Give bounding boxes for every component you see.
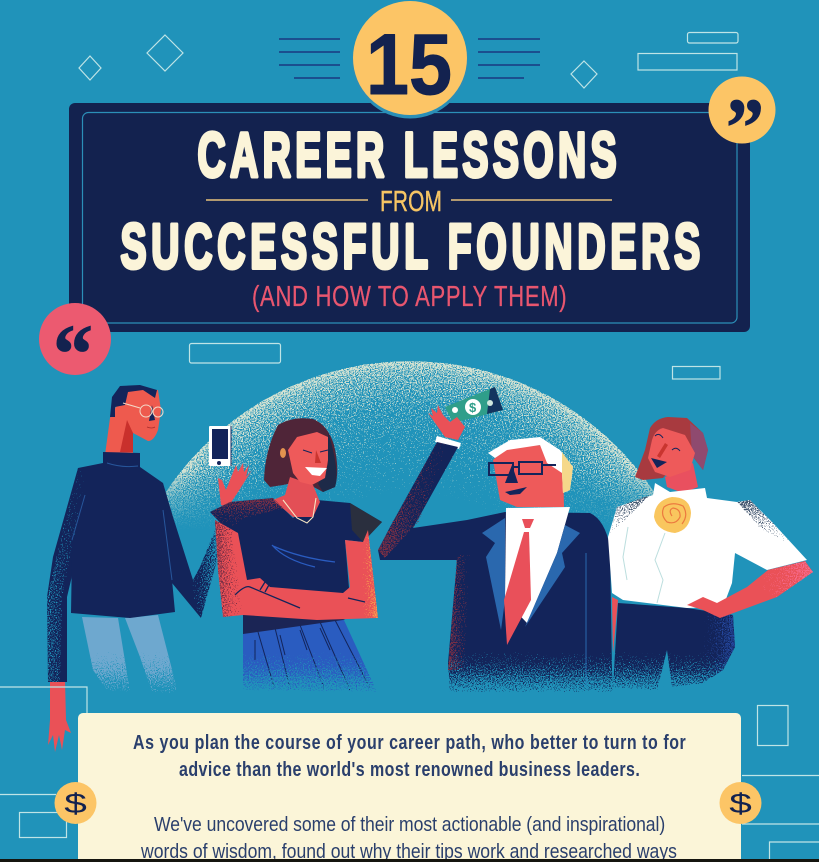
- subtitle: (AND HOW TO APPLY THEM): [252, 281, 567, 313]
- man shirt: [505, 507, 570, 623]
- man face: [493, 445, 564, 507]
- man shirt cuff: [435, 436, 461, 449]
- man tie: [522, 519, 534, 528]
- man right sleeve: [155, 483, 217, 618]
- intro heading text: advice than the world's most renowned business leaders.: [179, 758, 640, 780]
- man mouth: [505, 487, 527, 495]
- woman top: [210, 498, 382, 600]
- intro body text: We've uncovered some of their most actionable (and inspirational): [154, 813, 665, 835]
- number badge 15: 15: [366, 17, 452, 113]
- title: successful founders: SUCCESSFUL FOUNDERS: [120, 213, 700, 282]
- man hair: [110, 385, 157, 417]
- stippled dome behind figures: [166, 361, 654, 527]
- man white hair: [488, 437, 573, 493]
- icon: right dollar badge: [720, 782, 762, 824]
- icon: left dollar badge: $: [64, 788, 87, 819]
- cash bill: $: [469, 400, 477, 415]
- woman hair: [264, 418, 337, 492]
- woman pants: [613, 603, 735, 690]
- figure: man with turtleneck and phone: [47, 385, 217, 752]
- woman arm on hip: [687, 561, 813, 618]
- man left sleeve: [47, 468, 90, 682]
- man jeans: [82, 615, 178, 693]
- stippled fade at the feet of figures: [76, 652, 756, 696]
- intro body text: [140, 813, 677, 862]
- woman necklace: [283, 498, 316, 523]
- cash bill: [445, 387, 503, 423]
- woman blouse: [608, 483, 807, 608]
- woman hair: [635, 417, 708, 480]
- woman shoulder shading: [210, 498, 284, 530]
- title: from: FROM: [380, 186, 442, 218]
- corner outline near the card: [0, 687, 87, 716]
- title: career lessons: CAREER LESSONS: [198, 121, 617, 191]
- woman arms: [215, 520, 378, 620]
- intro card: [78, 713, 741, 862]
- icon: right dollar badge: $: [729, 788, 752, 819]
- figure: smiling woman with crossed arms: [210, 418, 382, 692]
- divider lines around from: [206, 199, 612, 201]
- woman arm stipple: [215, 520, 243, 617]
- icon: left dollar badge: [54, 782, 96, 824]
- man sweater: [71, 452, 175, 618]
- man nose: [505, 465, 518, 483]
- man nose: [149, 405, 155, 421]
- dark bottom strip: [0, 859, 819, 862]
- intro body text: words of wisdom, found out why their tips work and researched ways: [140, 840, 677, 862]
- icon: closing quote badge: [708, 76, 776, 175]
- man forearm and hand: [48, 680, 71, 752]
- man glasses: [123, 403, 163, 417]
- woman face: [648, 428, 695, 477]
- sleeve stipple shading: [47, 468, 85, 682]
- woman neck: [665, 463, 698, 493]
- woman face: [288, 432, 328, 485]
- icon: smartphone: [209, 426, 231, 466]
- header lines left and right of the number badge: [279, 39, 540, 78]
- suit stipple: [378, 442, 448, 558]
- suit jacket: [378, 442, 613, 692]
- woman waist: [243, 612, 348, 634]
- man lapels: [482, 518, 505, 630]
- woman hand: [218, 463, 252, 507]
- intro heading text: [133, 731, 686, 780]
- intro heading text: As you plan the course of your career path, who better to turn to for: [133, 731, 686, 753]
- rose brooch: [654, 497, 691, 533]
- hand sliver behind man: [612, 597, 618, 653]
- woman neck and chest: [273, 477, 320, 517]
- skirt pleats: [255, 620, 370, 690]
- icon: opening quote badge: [39, 303, 111, 401]
- figure: laughing woman in white blouse: [608, 417, 813, 690]
- man glasses: [489, 462, 556, 475]
- icon: closing quote badge: ”: [726, 82, 764, 175]
- blouse stipple: [737, 500, 795, 548]
- title panel: [69, 103, 750, 332]
- man hand: [428, 405, 465, 440]
- figure: older man in suit holding cash: [378, 387, 613, 692]
- number badge 15: [352, 1, 468, 118]
- icon: opening quote badge: “: [53, 308, 93, 401]
- blouse creases: [623, 527, 665, 603]
- woman skirt: [243, 618, 377, 692]
- man head and neck: [105, 390, 161, 455]
